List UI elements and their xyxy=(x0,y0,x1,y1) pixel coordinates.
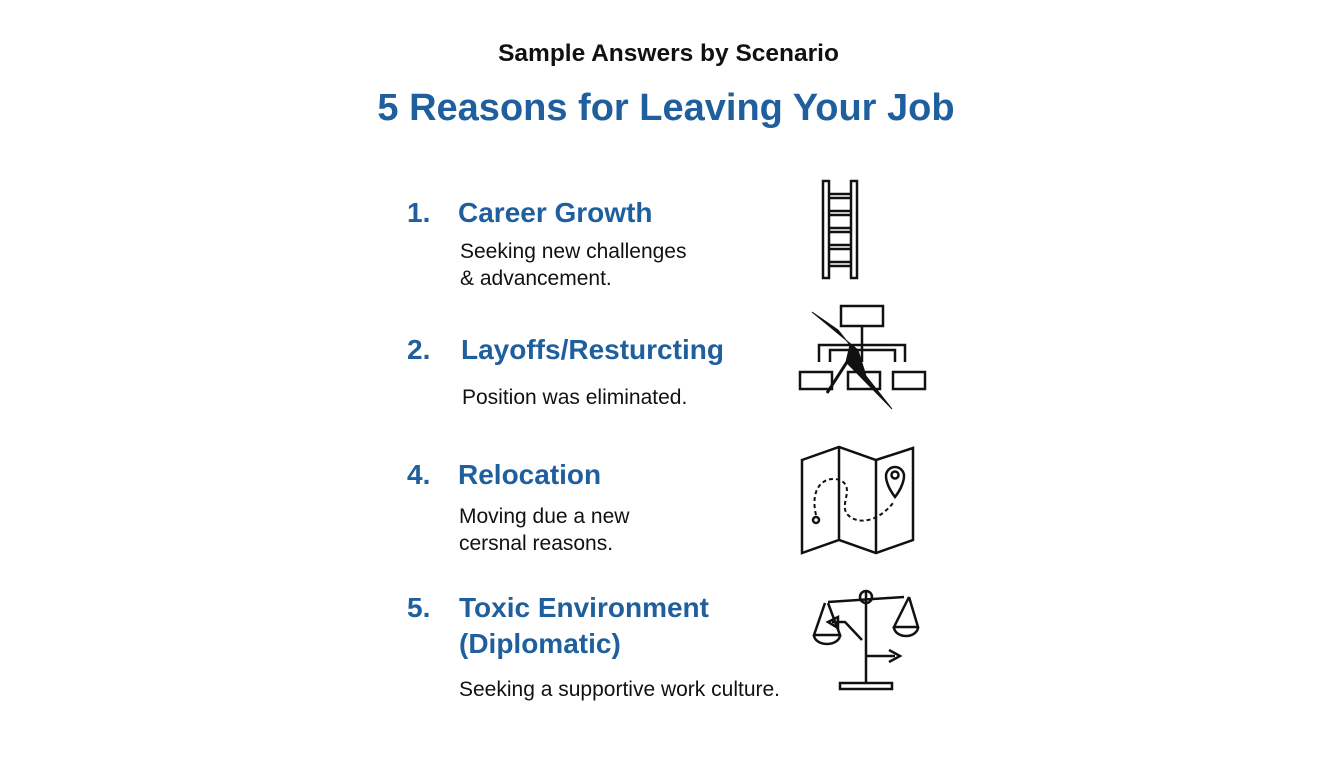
icon: map xyxy=(802,447,913,553)
item 5: Seeking a supportive work culture. xyxy=(459,678,780,701)
item 1: Seeking new challenges xyxy=(460,240,686,263)
item 1: & advancement. xyxy=(460,267,612,290)
item 1: 1. xyxy=(407,197,430,228)
subtitle: Sample Answers by Scenario xyxy=(498,40,839,67)
icon: org chart broken xyxy=(800,306,925,409)
item 4: Relocation xyxy=(458,459,601,490)
item 4: cersnal reasons. xyxy=(459,532,613,555)
item 2: Layoffs/Resturcting xyxy=(461,334,724,365)
icon: scale with arrows xyxy=(814,591,918,689)
title: 5 Reasons for Leaving Your Job xyxy=(377,87,955,129)
item 4 xyxy=(407,459,630,555)
item 1 xyxy=(407,197,686,290)
item 2 xyxy=(407,334,724,409)
item 2: Position was eliminated. xyxy=(462,386,687,409)
item 5: (Diplomatic) xyxy=(459,628,621,659)
item 5: Toxic Environment xyxy=(459,592,709,623)
item 5 xyxy=(407,592,780,701)
icon: ladder xyxy=(823,181,857,278)
item 5: 5. xyxy=(407,592,430,623)
item 4: Moving due a new xyxy=(459,505,629,528)
item 2: 2. xyxy=(407,334,430,365)
item 1: Career Growth xyxy=(458,197,652,228)
item 4: 4. xyxy=(407,459,430,490)
